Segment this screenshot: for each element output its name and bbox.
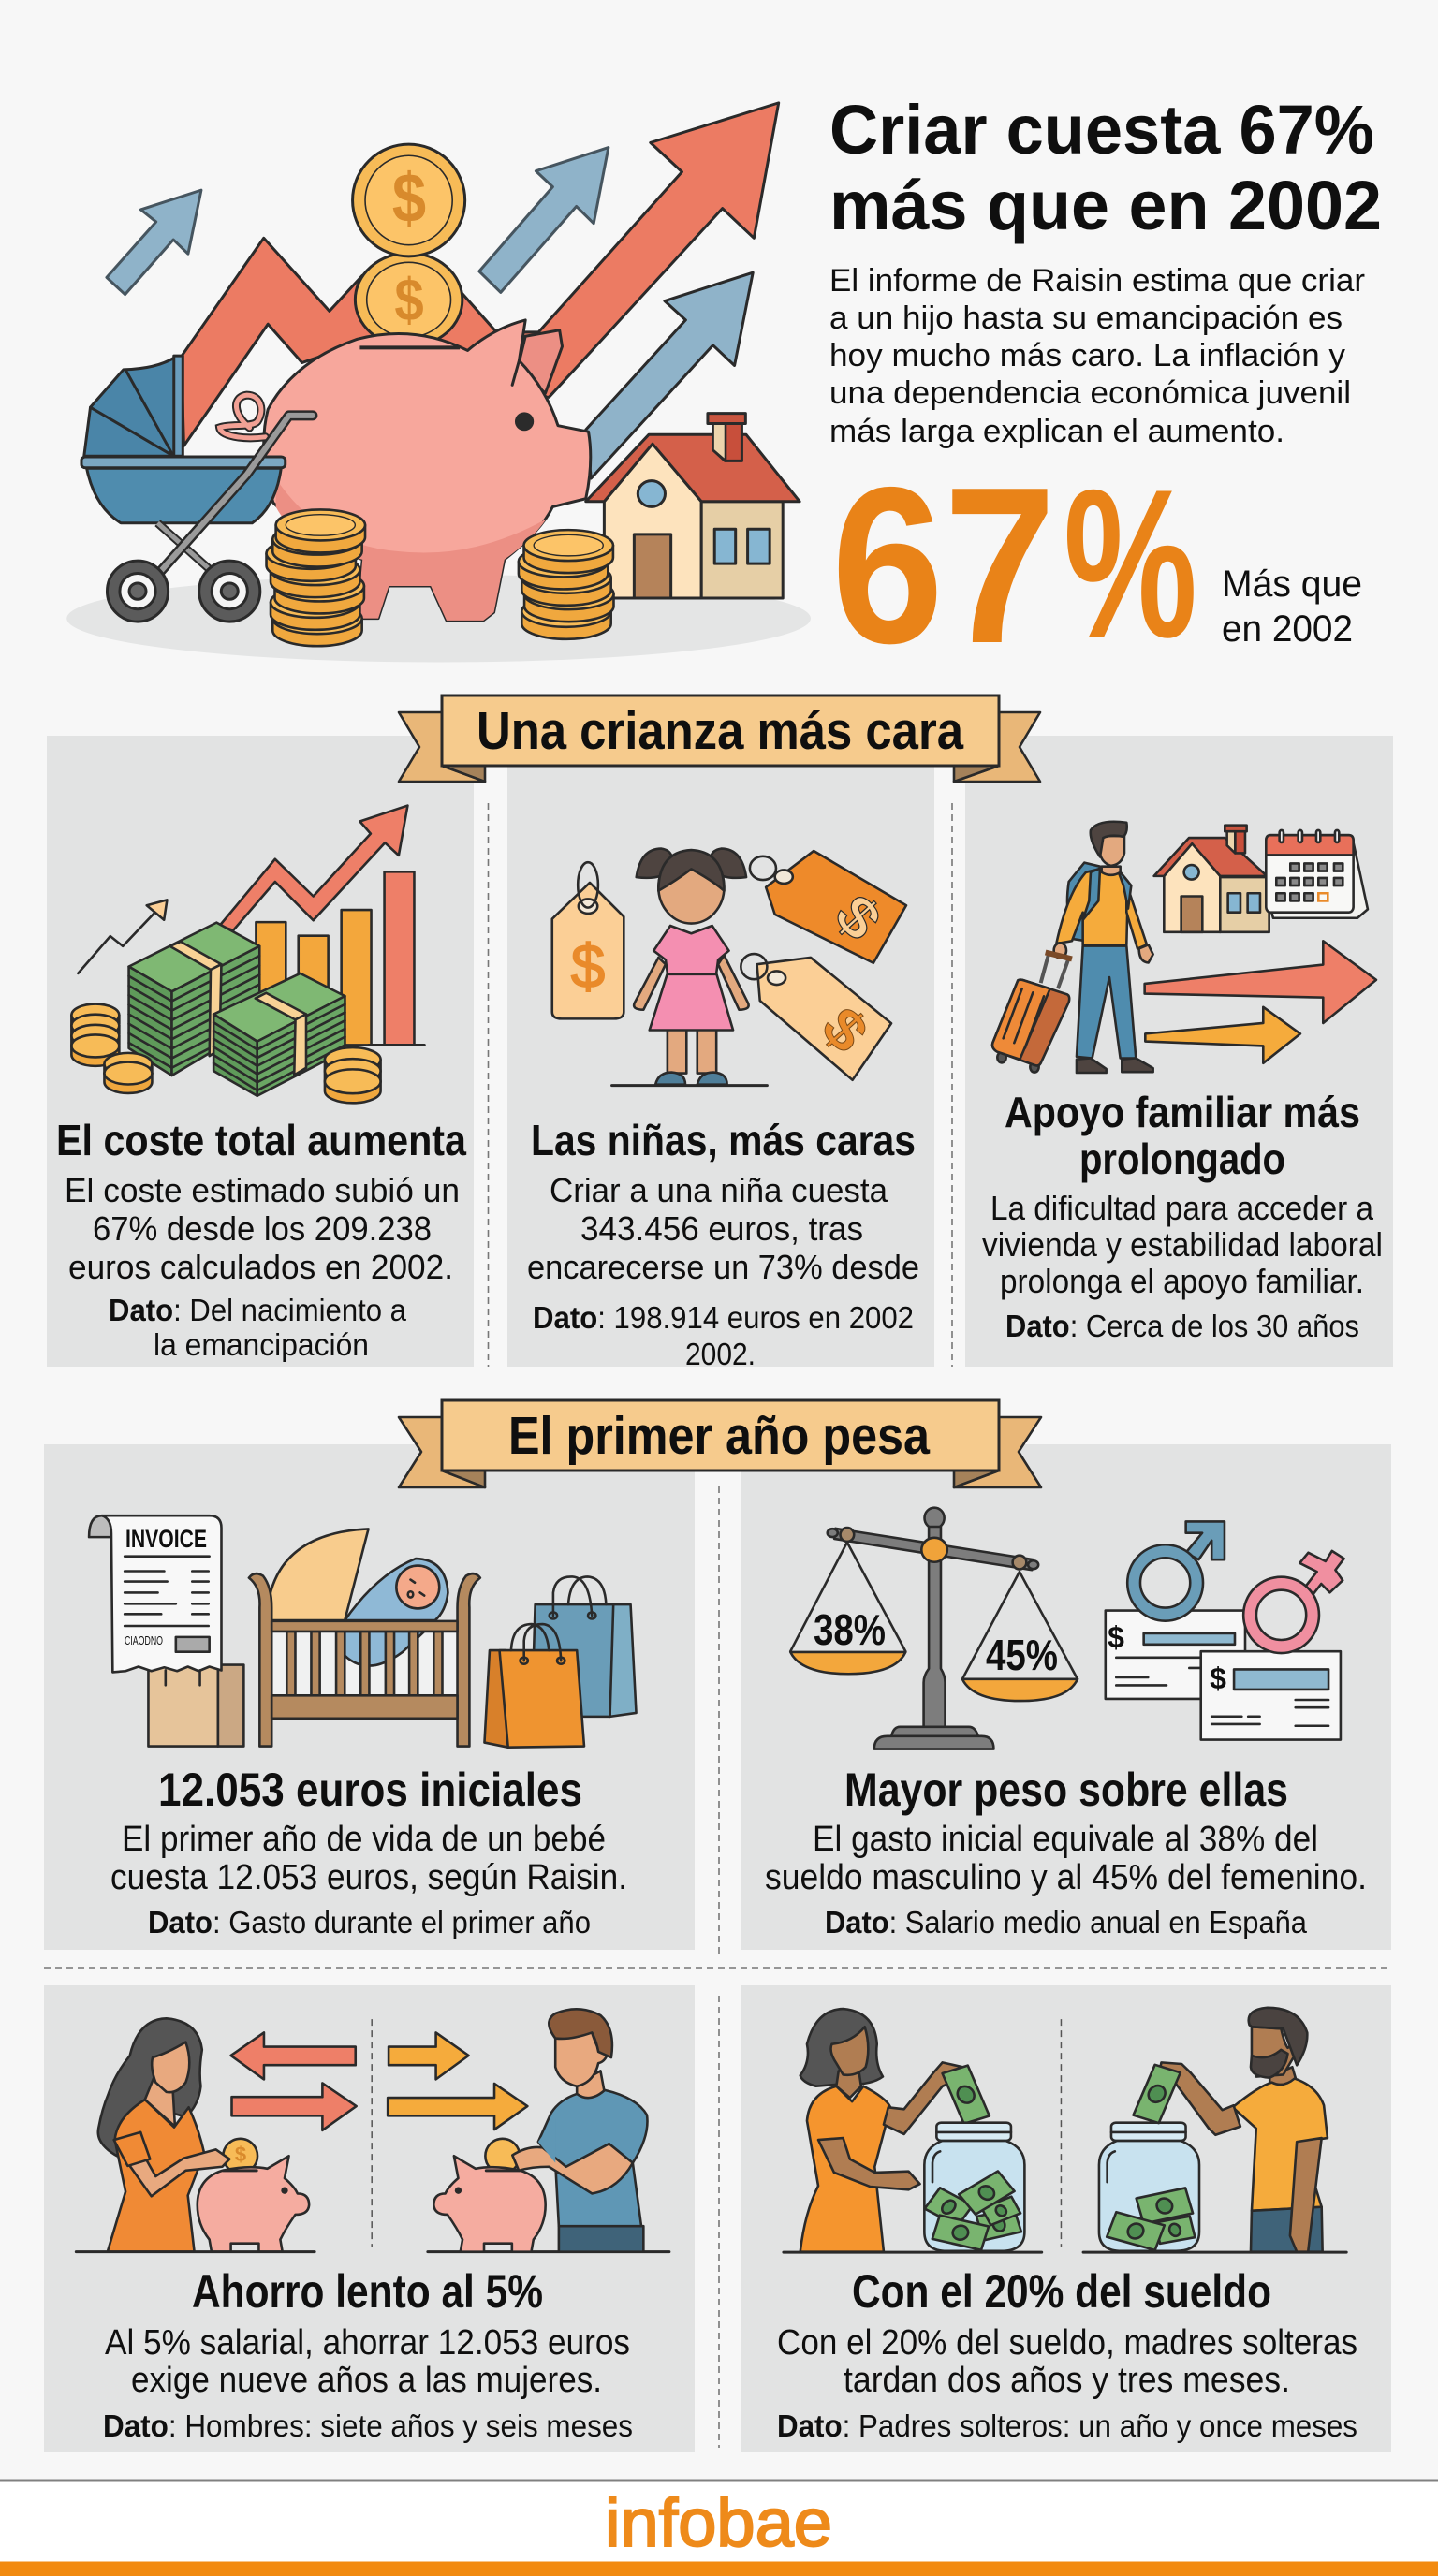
panel: el coste total aumenta: euros calculados en 2002. — [68, 1248, 453, 1286]
panel: ahorro lento al 5%: Ahorro lento al 5% — [192, 2265, 543, 2318]
panel: el coste total aumenta — [47, 736, 474, 1367]
panel: las niñas, más caras: 2002. — [685, 1337, 756, 1371]
panel: el coste total aumenta: 67% desde los 209.238 — [93, 1209, 432, 1248]
panel: las niñas, más caras: Criar a una niña cuesta — [550, 1171, 888, 1209]
intro paragraph — [829, 263, 1365, 449]
footer with infobae logo: infobae — [605, 2486, 832, 2561]
panel: apoyo familiar más prolongado: prolongado — [1079, 1134, 1285, 1183]
icon: woman and man saving into piggy banks with arrows — [76, 2009, 669, 2252]
panel: mayor peso sobre ellas: Mayor peso sobre ellas — [844, 1764, 1288, 1816]
icon: balance scale with 38% and 45%, gender symbols and pay cheques: 38% — [814, 1605, 886, 1654]
big stat: 67%: % — [1064, 445, 1197, 681]
icon: girl with price tags: $ — [823, 883, 894, 952]
section banner: el primer año pesa — [399, 1400, 1041, 1487]
panel: el coste total aumenta: Dato: Del nacimiento a — [109, 1293, 407, 1327]
footer with infobae logo — [0, 2479, 1438, 2576]
panel: las niñas, más caras — [507, 736, 934, 1371]
section banner: el primer año pesa: El primer año pesa — [508, 1406, 931, 1466]
icon: balance scale with 38% and 45%, gender symbols and pay cheques: $ — [1108, 1620, 1124, 1654]
icon: invoice, crib with baby and shopping bags: CIAODNO — [125, 1633, 163, 1647]
icon: single mother and single father filling jars with banknotes — [784, 2008, 1346, 2252]
panel: ahorro lento al 5%: exige nueve años a las mujeres. — [131, 2361, 602, 2400]
title — [829, 91, 1382, 244]
panel: las niñas, más caras: Las niñas, más caras — [531, 1116, 916, 1164]
big stat: 67%: Más que — [1222, 564, 1362, 605]
icon: woman and man saving into piggy banks with arrows: $ — [235, 2143, 246, 2166]
hero illustration: piggy bank, stroller, house and rising arrows: $ — [392, 159, 426, 237]
icon: young man with suitcase, house, calendar and arrows — [992, 822, 1376, 1073]
panel: las niñas, más caras: Dato: 198.914 euros en 2002 — [533, 1300, 914, 1335]
panel: apoyo familiar más prolongado: vivienda y estabilidad laboral — [982, 1225, 1383, 1264]
icon: girl with price tags: $ — [810, 995, 881, 1064]
icon: invoice, crib with baby and shopping bags — [89, 1515, 637, 1748]
icon: balance scale with 38% and 45%, gender symbols and pay cheques: 45% — [986, 1631, 1058, 1679]
panel: apoyo familiar más prolongado — [965, 736, 1393, 1367]
intro paragraph: a un hijo hasta su emancipación es — [829, 300, 1343, 336]
panel: ahorro lento al 5%: Dato: Hombres: siete años y seis meses — [103, 2408, 633, 2443]
panel: apoyo familiar más prolongado: La dificultad para acceder a — [990, 1189, 1374, 1227]
panel: 12.053 euros iniciales: cuesta 12.053 euros, según Raisin. — [110, 1858, 627, 1897]
panel: con el 20% del sueldo: Con el 20% del sueldo — [852, 2265, 1271, 2318]
panel: el coste total aumenta: El coste total aumenta — [56, 1116, 466, 1164]
icon: girl with price tags: $ — [571, 931, 605, 1001]
panel: 12.053 euros iniciales: El primer año de vida de un bebé — [122, 1820, 606, 1859]
icon: money stacks and rising bars — [71, 806, 424, 1103]
panel: las niñas, más caras: encarecerse un 73% desde — [527, 1248, 919, 1286]
intro paragraph: una dependencia económica juvenil — [829, 375, 1351, 411]
panel: mayor peso sobre ellas: El gasto inicial equivale al 38% del — [813, 1820, 1318, 1859]
panel: mayor peso sobre ellas — [741, 1444, 1391, 1950]
panel: apoyo familiar más prolongado: prolonga el apoyo familiar. — [1000, 1262, 1364, 1300]
panel: mayor peso sobre ellas: sueldo masculino y al 45% del femenino. — [765, 1858, 1367, 1897]
panel: el coste total aumenta: la emancipación — [154, 1327, 369, 1362]
title: Criar cuesta 67% — [829, 91, 1374, 168]
panel: 12.053 euros iniciales — [44, 1444, 695, 1950]
hero illustration: piggy bank, stroller, house and rising arrows: $ — [394, 266, 424, 333]
panel: las niñas, más caras: 343.456 euros, tras — [580, 1209, 863, 1248]
big stat: 67% — [831, 442, 1362, 690]
panel: ahorro lento al 5% — [44, 1985, 695, 2452]
big stat: 67%: en 2002 — [1222, 608, 1353, 650]
panel: apoyo familiar más prolongado: Apoyo familiar más — [1005, 1088, 1360, 1136]
intro paragraph: El informe de Raisin estima que criar — [829, 263, 1365, 299]
intro paragraph: más larga explican el aumento. — [829, 414, 1284, 449]
panel: con el 20% del sueldo: Dato: Padres solteros: un año y once meses — [777, 2408, 1357, 2443]
icon: invoice, crib with baby and shopping bags: INVOICE — [125, 1525, 207, 1553]
section banner: una crianza más cara: Una crianza más cara — [477, 701, 964, 761]
panel: ahorro lento al 5%: Al 5% salarial, ahorrar 12.053 euros — [105, 2323, 630, 2363]
panel: mayor peso sobre ellas: Dato: Salario medio anual en España — [825, 1905, 1308, 1939]
section banner: una crianza más cara — [399, 695, 1040, 782]
panel: apoyo familiar más prolongado: Dato: Cerca de los 30 años — [1005, 1309, 1359, 1343]
panel: el coste total aumenta: El coste estimado subió un — [65, 1171, 460, 1209]
panel: 12.053 euros iniciales: 12.053 euros iniciales — [158, 1764, 582, 1816]
panel: con el 20% del sueldo: tardan dos años y tres meses. — [844, 2361, 1290, 2400]
title: más que en 2002 — [829, 167, 1382, 244]
panel: con el 20% del sueldo: Con el 20% del sueldo, madres solteras — [777, 2323, 1357, 2363]
intro paragraph: hoy mucho más caro. La inflación y — [829, 338, 1345, 373]
icon: girl with price tags — [552, 849, 906, 1086]
icon: balance scale with 38% and 45%, gender symbols and pay cheques — [790, 1508, 1344, 1749]
hero illustration: piggy bank, stroller, house and rising arrows — [66, 103, 811, 663]
panel: 12.053 euros iniciales: Dato: Gasto durante el primer año — [148, 1905, 591, 1939]
big stat: 67%: 67 — [831, 442, 1056, 690]
panel: con el 20% del sueldo — [741, 1985, 1391, 2452]
icon: balance scale with 38% and 45%, gender symbols and pay cheques: $ — [1210, 1661, 1226, 1695]
